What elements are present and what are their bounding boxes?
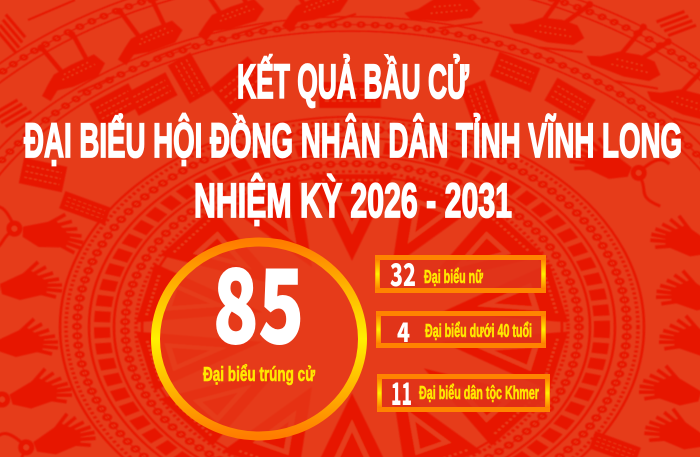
- title line 1: KẾT QUẢ BẦU CỬ: [237, 54, 469, 109]
- number 85: 85: [213, 226, 304, 373]
- label: Đại biểu nữ: [424, 267, 484, 287]
- value 32: 32: [390, 250, 416, 295]
- label: Đại biểu dưới 40 tuổi: [425, 321, 532, 341]
- gradient ring: [156, 242, 362, 436]
- stat box: women delegates: [376, 250, 546, 295]
- value 4: 4: [397, 311, 410, 350]
- stat box: Khmer delegates: [378, 369, 550, 414]
- value 11: 11: [391, 369, 412, 414]
- title line 3: NHIỆM KỲ 2026 - 2031: [194, 173, 512, 228]
- label: Đại biểu dân tộc Khmer: [419, 383, 539, 403]
- caption: Đại biểu trúng cử: [203, 364, 315, 386]
- circle panel: total delegates: [156, 226, 362, 436]
- stat box: delegates under 40: [376, 311, 546, 350]
- title: [24, 54, 682, 228]
